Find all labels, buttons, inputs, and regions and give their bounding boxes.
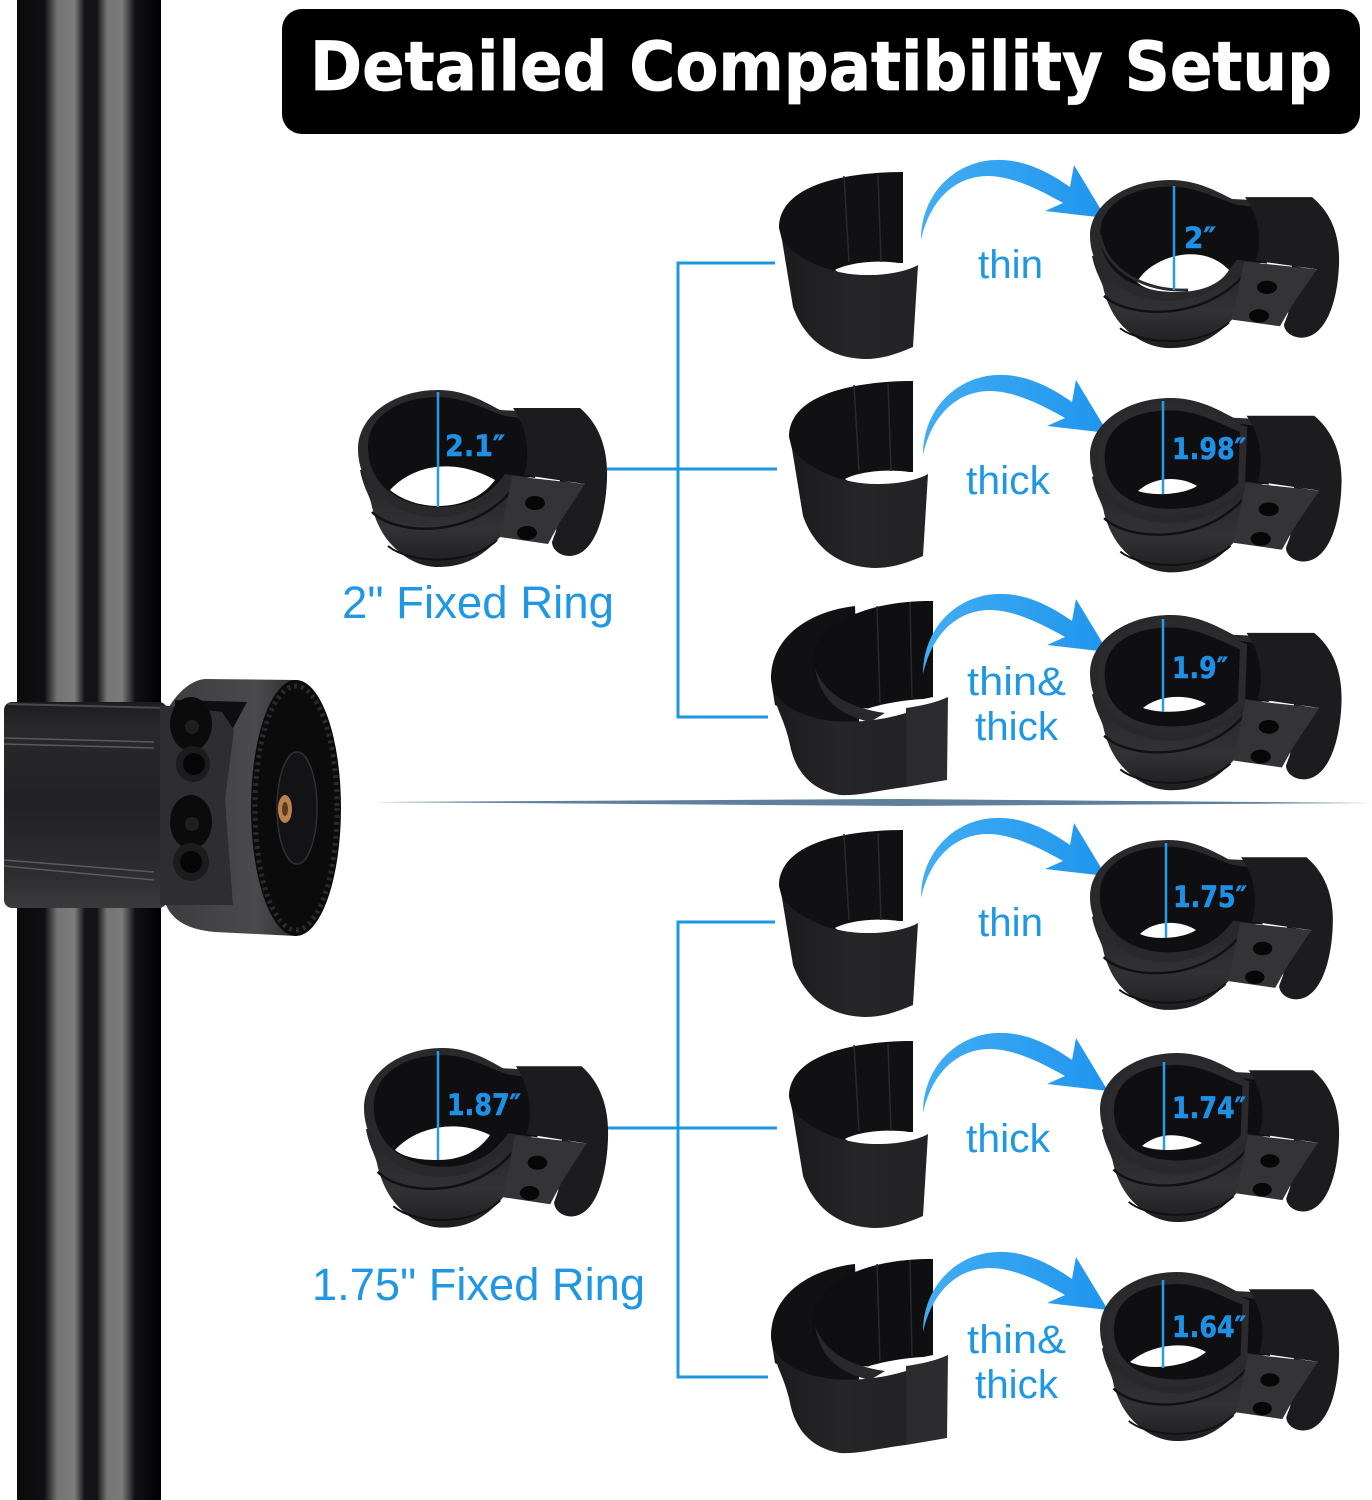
row thick lower: thick — [966, 1117, 1051, 1161]
panel: 1.75 inch fixed ring — [312, 818, 1339, 1453]
pole — [17, 0, 161, 1500]
row thin and thick lower — [771, 1252, 1339, 1453]
title banner — [282, 9, 1360, 134]
row thin and thick lower: thick — [975, 1363, 1059, 1407]
base ring 2 inch — [358, 390, 607, 567]
label 2 inch fixed ring: 2" Fixed Ring — [342, 577, 614, 628]
row thin lower — [779, 818, 1333, 1017]
panel: 2 inch fixed ring — [342, 160, 1342, 795]
row thin — [779, 160, 1339, 359]
clamp band — [4, 702, 167, 908]
mount disc — [166, 679, 341, 936]
row thin and thick: thin& — [967, 660, 1066, 704]
label 1.75 inch fixed ring: 1.75" Fixed Ring — [312, 1259, 645, 1310]
row thick — [789, 375, 1342, 572]
divider — [372, 799, 1372, 806]
connector lines lower — [607, 922, 777, 1377]
row thin and thick lower: thin& — [967, 1318, 1066, 1362]
product photo: pole with mounted clamp — [4, 0, 341, 1500]
row thick: 1.98″ — [1172, 432, 1246, 466]
connector lines upper — [607, 263, 777, 717]
row thin lower: thin — [978, 901, 1043, 945]
row thin: 2″ — [1184, 221, 1216, 255]
row thin: thin — [978, 243, 1043, 287]
row thin and thick — [771, 594, 1342, 795]
row thin and thick: thick — [975, 705, 1059, 749]
base ring 2 inch: 2.1″ — [445, 429, 505, 463]
row thick lower: 1.74″ — [1172, 1091, 1246, 1125]
row thin lower: 1.75″ — [1173, 880, 1247, 914]
clamp plate and screws — [160, 697, 234, 905]
row thick lower — [789, 1033, 1339, 1228]
row thin and thick lower: 1.64″ — [1172, 1310, 1246, 1344]
base ring 1.75 inch — [364, 1048, 608, 1228]
row thin and thick: 1.9″ — [1172, 651, 1228, 685]
row thick: thick — [966, 459, 1051, 503]
base ring 1.75 inch: 1.87″ — [447, 1088, 521, 1122]
